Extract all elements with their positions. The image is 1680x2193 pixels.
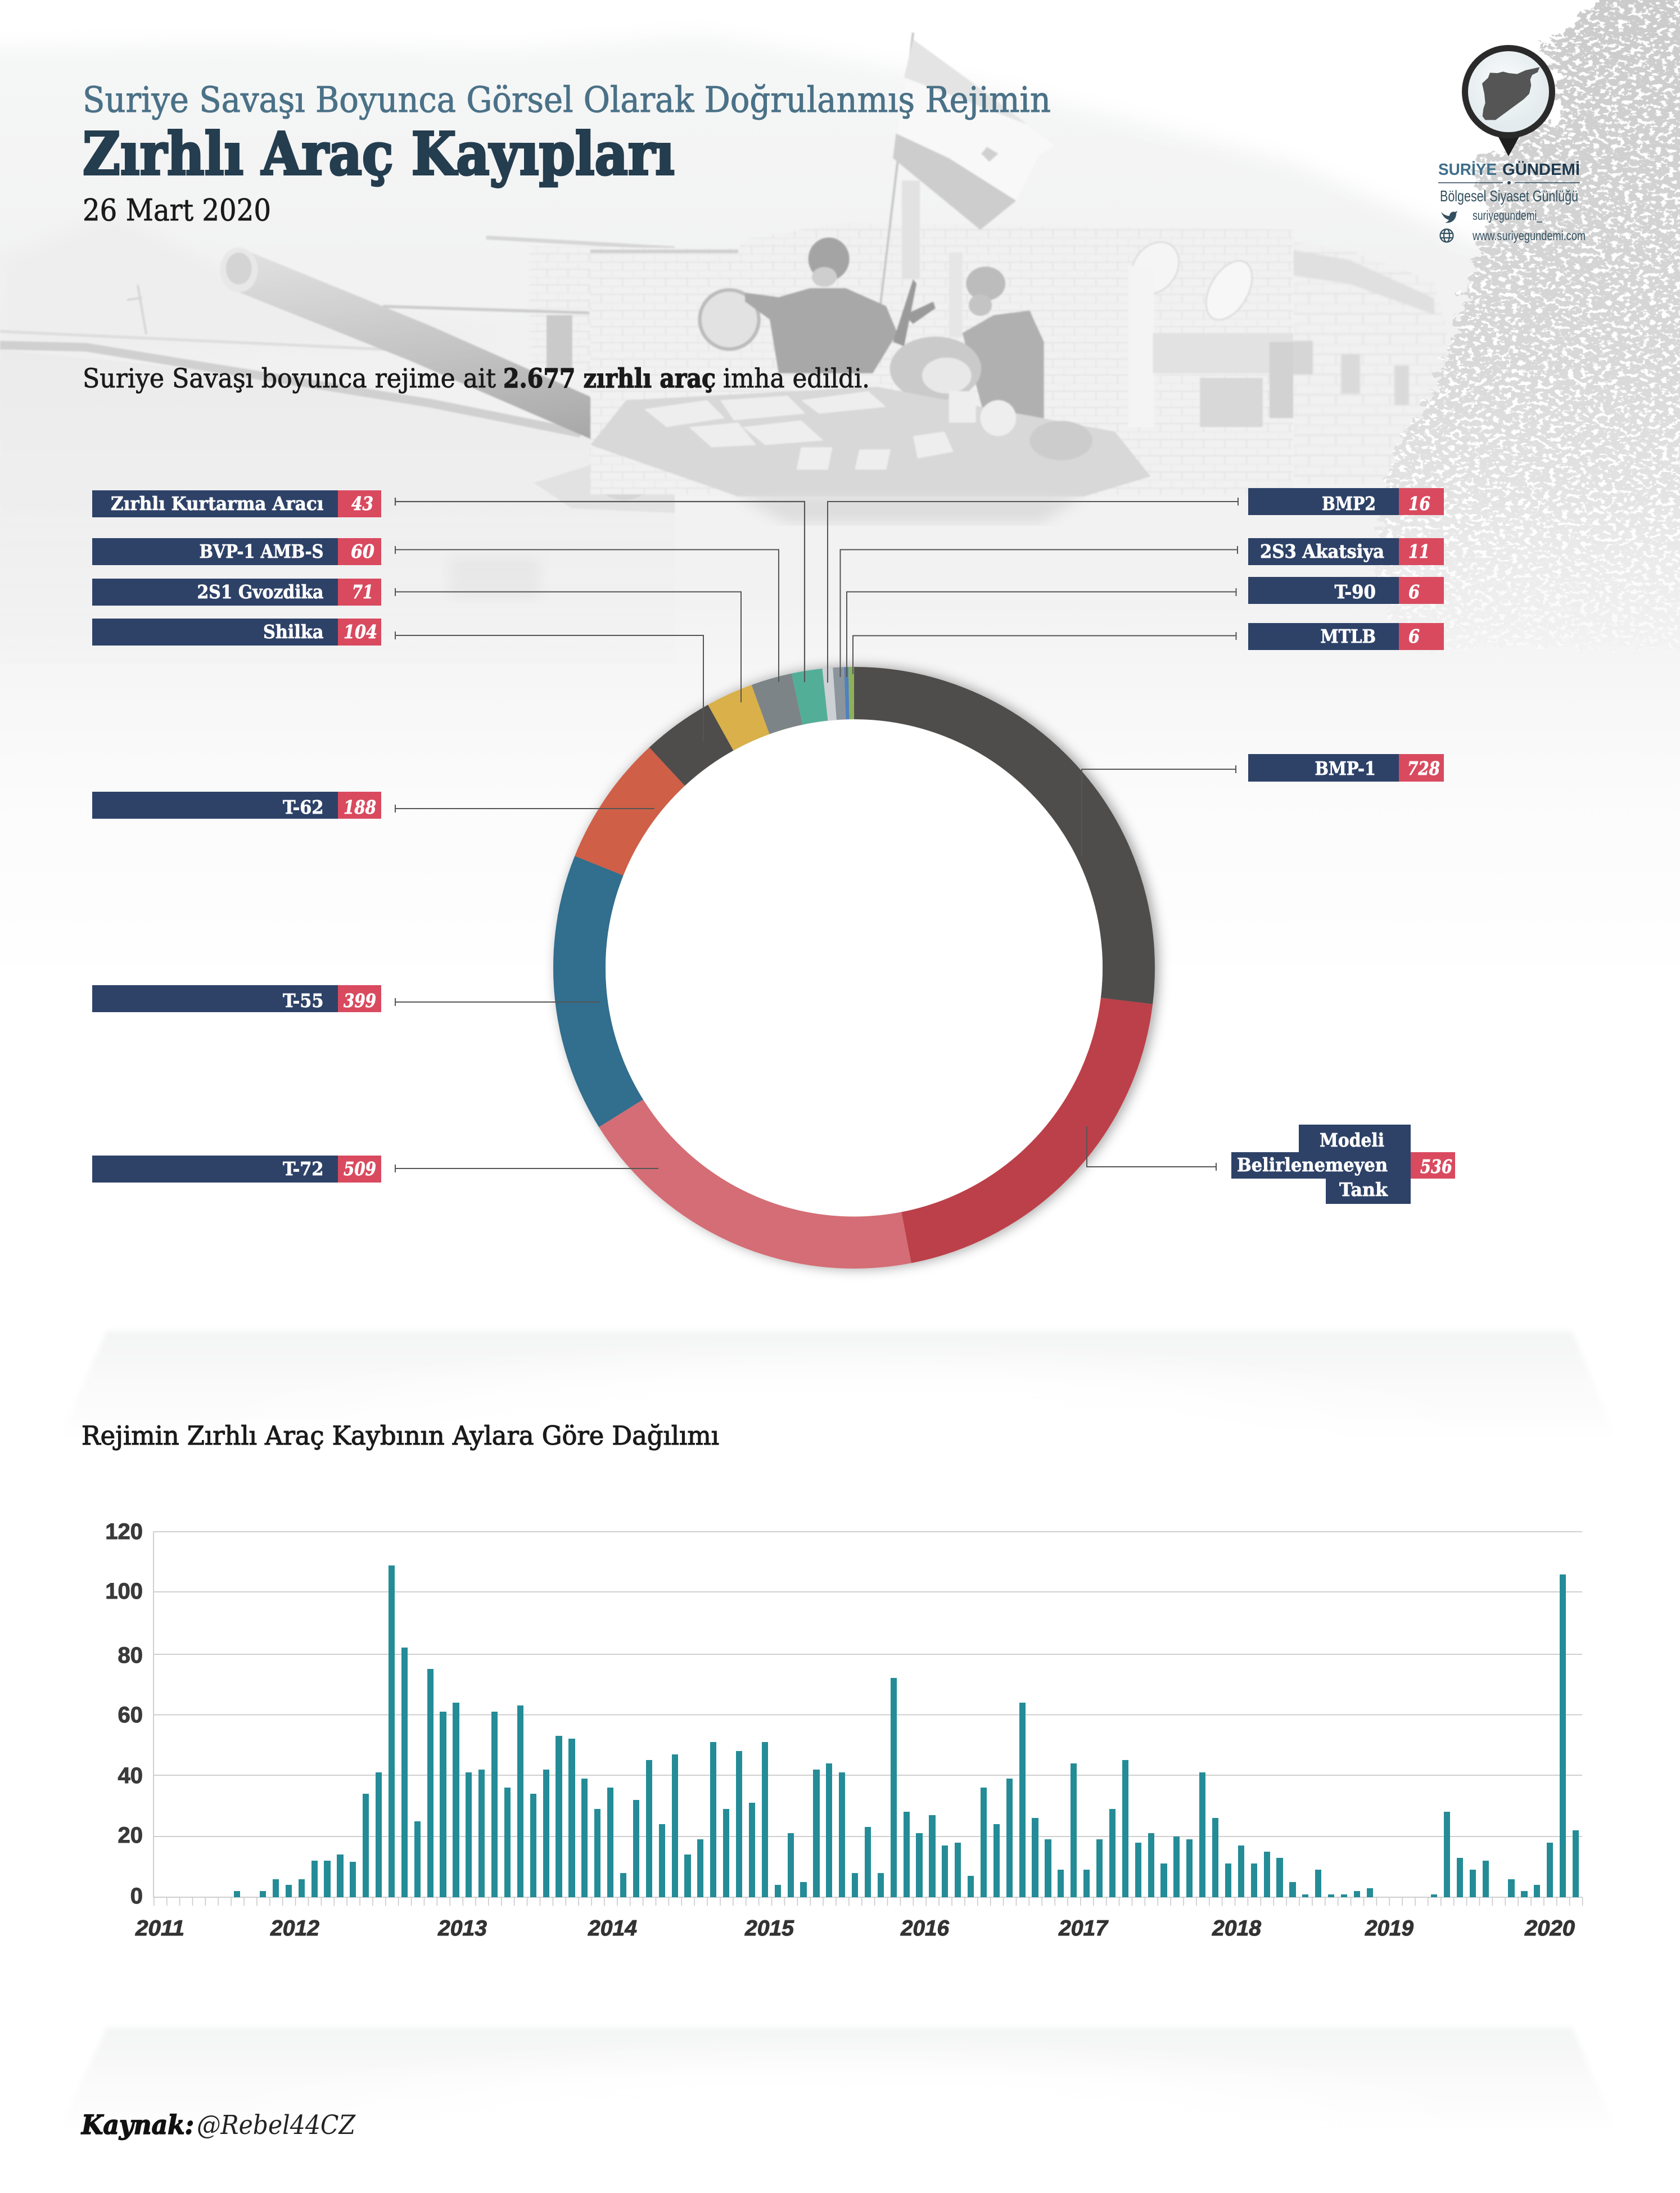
label: BMP2: 16 <box>1408 493 1430 515</box>
logo: Suriye Gündemi <box>1438 48 1586 243</box>
label: BVP-1 AMB-S: 60 <box>351 540 374 562</box>
bars <box>234 1565 1579 1897</box>
label: BVP-1 AMB-S: BVP-1 AMB-S <box>199 540 324 562</box>
label: Modeli Belirlenemeyen Tank: Tank <box>1339 1179 1388 1201</box>
summary sentence: Suriye Savaşı boyunca rejime ait <box>83 363 496 394</box>
x axis year labels: 2013 <box>437 1916 487 1941</box>
label: Modeli Belirlenemeyen Tank: Modeli <box>1320 1129 1384 1151</box>
label: T-62 <box>92 792 381 819</box>
label: 2S3 Akatsiya: 11 <box>1408 540 1430 562</box>
y axis labels: 0 <box>130 1884 143 1908</box>
x axis year labels: 2011 <box>135 1916 184 1941</box>
label: 2S1 Gvozdika: 71 <box>352 581 373 603</box>
y axis labels: 100 <box>105 1579 143 1604</box>
label: T-90: 6 <box>1408 581 1420 603</box>
donut chart <box>579 693 1129 1243</box>
label: Shilka: 104 <box>344 621 377 643</box>
label: 2S1 Gvozdika <box>92 579 381 606</box>
summary sentence <box>83 363 870 394</box>
label: 2S3 Akatsiya: 2S3 Akatsiya <box>1260 540 1384 562</box>
label: Shilka: Shilka <box>263 621 324 643</box>
label: Zırhlı Kurtarma Aracı: Zırhlı Kurtarma Aracı <box>111 493 324 515</box>
month ticks <box>153 1897 1583 1906</box>
x axis year labels: 2020 <box>1524 1916 1575 1941</box>
summary sentence: imha edildi. <box>723 363 870 394</box>
logo: Suriye Gündemi: SURİYE <box>1438 161 1497 179</box>
x axis year labels: 2015 <box>744 1916 794 1941</box>
logo: Suriye Gündemi: www.suriyegundemi.com <box>1472 228 1586 243</box>
decorative band above chart title <box>56 1331 1619 1574</box>
x axis year labels: 2016 <box>900 1916 949 1941</box>
label: Modeli Belirlenemeyen Tank: 536 <box>1420 1156 1452 1177</box>
soft hull patch <box>457 566 532 589</box>
main scene: building, soldiers and tank <box>590 33 1293 497</box>
label: T-72: 509 <box>344 1158 376 1180</box>
label: Shilka <box>92 619 381 646</box>
flag <box>898 78 910 136</box>
source <box>80 2110 356 2141</box>
label: BVP-1 AMB-S <box>92 538 381 565</box>
x axis year labels: 2014 <box>588 1916 637 1941</box>
sky above mountain ridge <box>0 0 1680 242</box>
x axis year labels: 2018 <box>1212 1916 1261 1941</box>
icon: globe <box>1440 229 1453 242</box>
label: BMP2 <box>1248 488 1444 515</box>
label: Zırhlı Kurtarma Aracı <box>92 490 381 517</box>
icon: map pin with Syria <box>1465 48 1552 156</box>
x axis year labels <box>135 1916 1575 1941</box>
label: T-55 <box>92 985 381 1012</box>
background photo: tank crew with flag <box>0 0 1680 695</box>
label: T-90 <box>1248 577 1444 604</box>
y axis labels <box>105 1519 143 1908</box>
summary sentence: 2.677 zırhlı araç <box>503 363 716 394</box>
label: T-62: 188 <box>344 796 376 818</box>
label: BMP2: BMP2 <box>1322 493 1376 515</box>
right tower <box>1293 250 1445 478</box>
label: 2S1 Gvozdika: 2S1 Gvozdika <box>197 581 324 603</box>
source: @Rebel44CZ <box>197 2110 356 2141</box>
y axis grid lines <box>153 1532 1582 1897</box>
label: T-90: T-90 <box>1335 581 1376 603</box>
logo: Suriye Gündemi: Bölgesel Siyaset Günlüğü <box>1440 187 1578 205</box>
label: T-62: T-62 <box>283 796 324 818</box>
label: Zırhlı Kurtarma Aracı: 43 <box>351 493 373 515</box>
label: T-55: T-55 <box>283 990 324 1012</box>
x axis year labels: 2019 <box>1365 1916 1413 1941</box>
label: BMP-1: 728 <box>1407 757 1440 779</box>
y axis labels: 40 <box>118 1763 143 1788</box>
x axis year labels: 2017 <box>1058 1916 1109 1941</box>
label: BMP-1 <box>1248 754 1444 782</box>
y axis labels: 60 <box>118 1703 143 1727</box>
label: Modeli Belirlenemeyen Tank: Belirlenemeyen <box>1237 1154 1388 1176</box>
right-hand tree <box>1372 0 1680 647</box>
date: 26 Mart 2020 <box>83 193 271 228</box>
bar chart: monthly losses <box>105 1519 1583 1941</box>
logo: Suriye Gündemi: GÜNDEMİ <box>1502 160 1580 179</box>
source: Kaynak: <box>80 2110 194 2141</box>
decorative band above source <box>56 2028 1619 2193</box>
leader lines <box>395 498 1238 1172</box>
label: T-72: T-72 <box>283 1158 324 1180</box>
tank hull shadow <box>737 495 1085 523</box>
icon: twitter <box>1441 211 1457 223</box>
label: 2S3 Akatsiya <box>1248 538 1444 565</box>
label: BMP-1: BMP-1 <box>1315 757 1376 779</box>
y axis labels: 80 <box>118 1643 143 1668</box>
title: Zırhlı Araç Kayıpları <box>83 119 675 188</box>
label: MTLB: MTLB <box>1320 625 1376 647</box>
label: Modeli Belirlenemeyen Tank <box>1231 1125 1455 1204</box>
base tone <box>0 0 1680 965</box>
label: T-72 <box>92 1156 381 1183</box>
label: T-55: 399 <box>344 990 376 1012</box>
x axis year labels: 2012 <box>270 1916 319 1941</box>
chart heading: Rejimin Zırhlı Araç Kaybının Aylara Göre Dağılımı <box>82 1420 719 1451</box>
label: MTLB: 6 <box>1408 625 1420 647</box>
subtitle: Suriye Savaşı Boyunca Görsel Olarak Doğrulanmış Rejimin <box>83 79 1051 120</box>
label: MTLB <box>1248 623 1444 650</box>
y axis labels: 120 <box>105 1519 143 1544</box>
left hill <box>0 214 506 360</box>
logo: Suriye Gündemi: suriyegundemi_ <box>1473 208 1543 223</box>
wall, barrel and left building <box>0 235 675 513</box>
y axis labels: 20 <box>118 1823 143 1848</box>
